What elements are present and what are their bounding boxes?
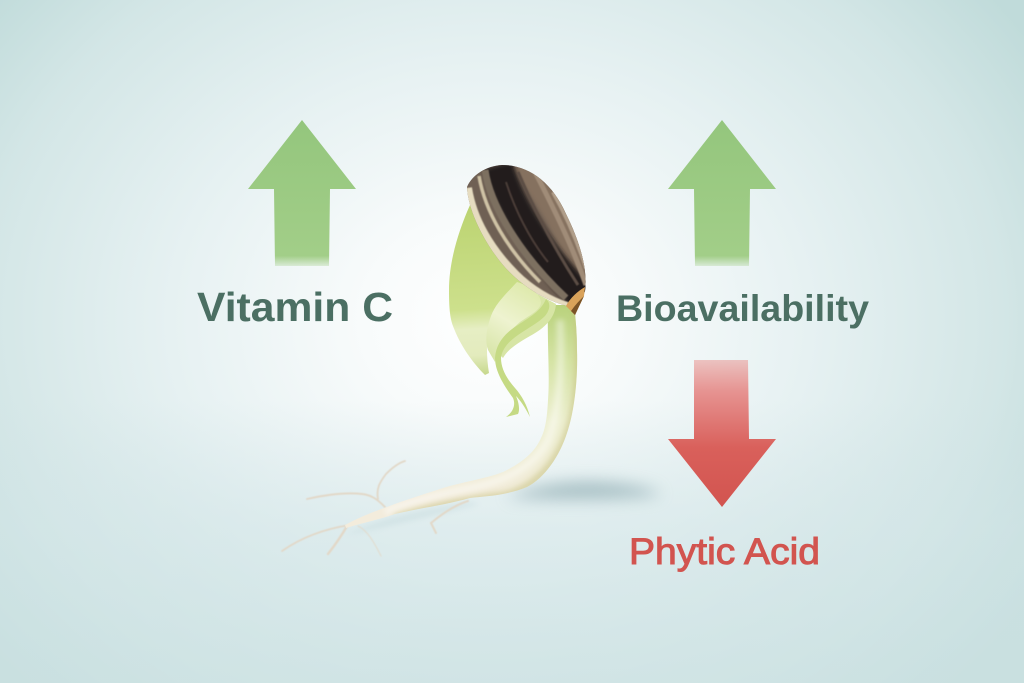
rootlets [282, 461, 468, 556]
outer leaf behind fold [495, 290, 556, 358]
arrow up: Bioavailability [668, 120, 776, 266]
cast shadow [505, 482, 662, 499]
stem and main root [345, 305, 579, 528]
arrow down: Phytic Acid [668, 360, 776, 507]
seed tip [566, 287, 585, 315]
left cotyledon leaf [449, 205, 525, 375]
striped seed shell [467, 160, 592, 315]
arrow up: Vitamin C [248, 120, 356, 266]
label: Bioavailability: Bioavailability [616, 288, 869, 329]
curling leaf tip [495, 299, 549, 417]
label: Phytic Acid: Phytic Acid [629, 531, 820, 572]
label: Vitamin C: Vitamin C [197, 284, 393, 330]
seedling illustration [282, 160, 662, 556]
middle fold leaf [486, 282, 541, 362]
